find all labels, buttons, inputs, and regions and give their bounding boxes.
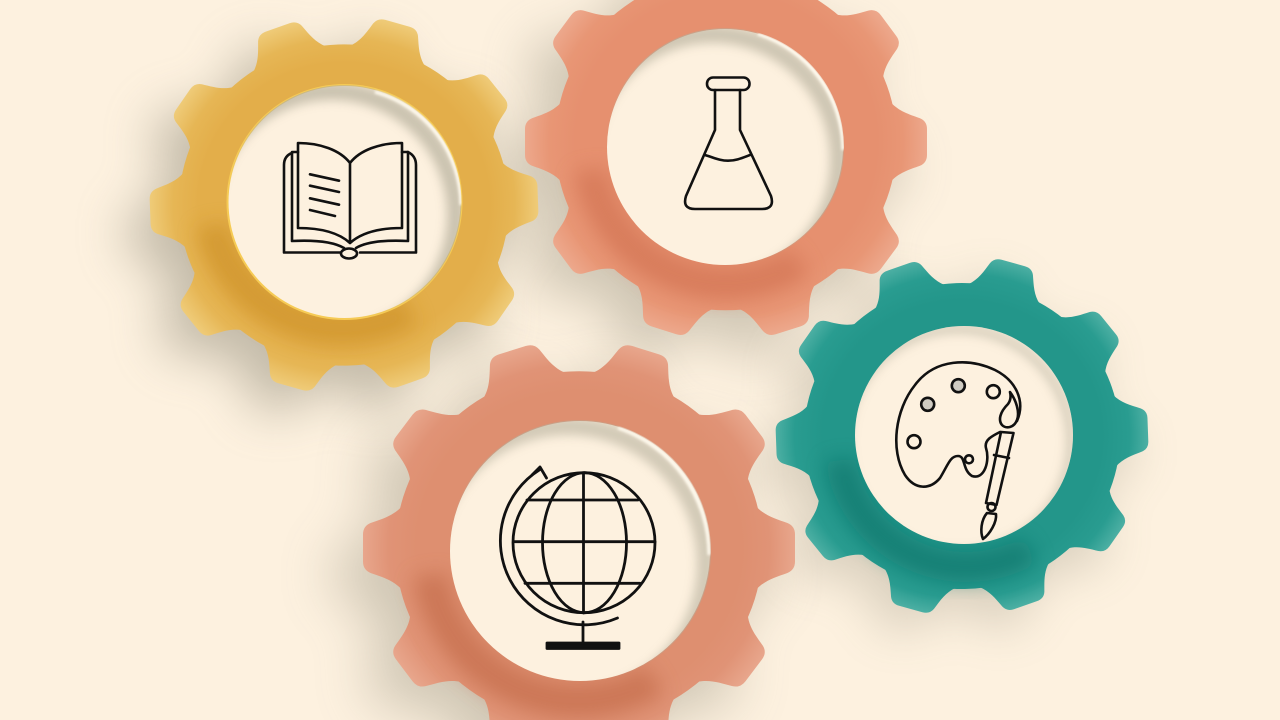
icon: globe on stand: [500, 467, 655, 648]
icon: paint palette and brush: [896, 362, 1020, 539]
gear: salmon with flask: [525, 0, 927, 343]
icon: open book: [284, 143, 416, 258]
gear shadows: [121, 0, 1138, 720]
icon: flask: [685, 78, 772, 209]
gear: teal with palette: [770, 248, 1154, 624]
gear: salmon with globe: [363, 337, 795, 720]
gear: yellow with book: [143, 7, 545, 403]
